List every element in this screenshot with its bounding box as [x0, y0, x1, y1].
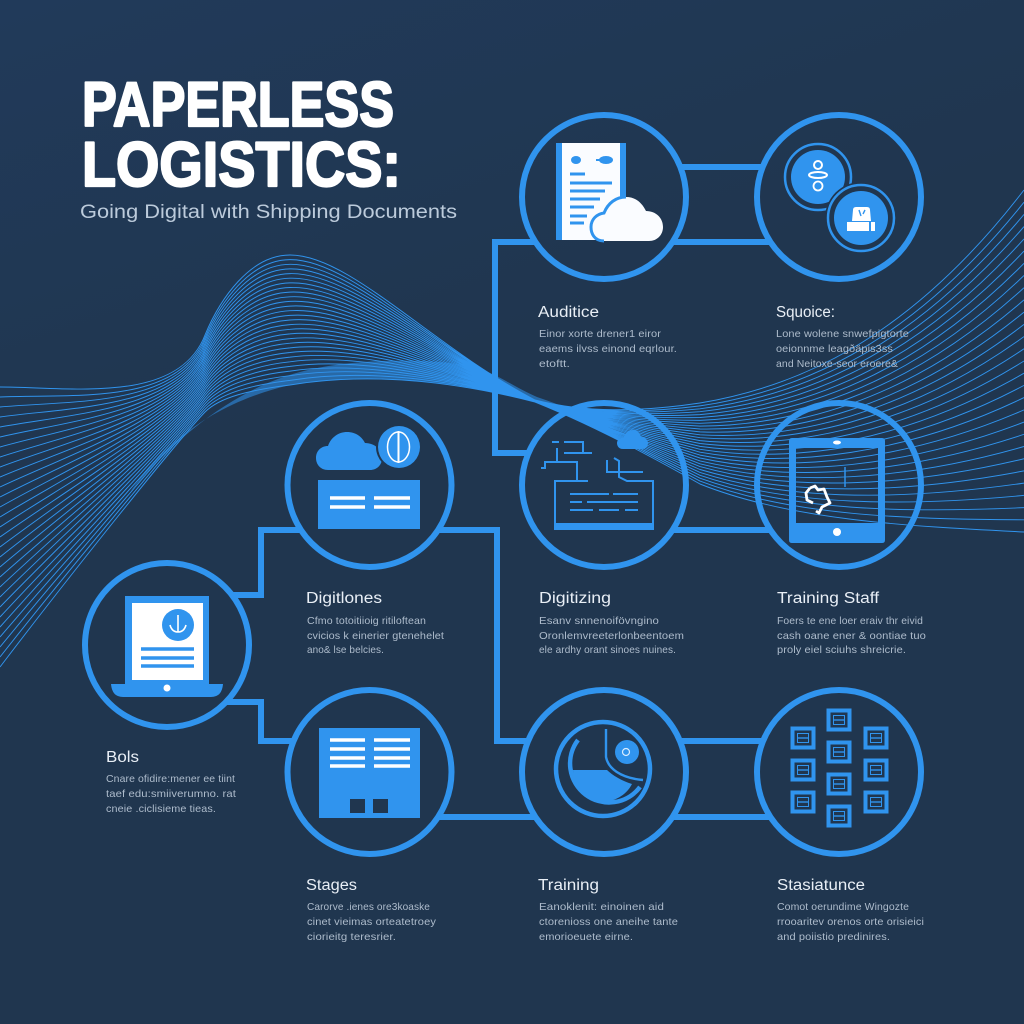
text: Digitlones: ano& lse belcies.	[307, 644, 384, 656]
icon: document with cloud	[556, 143, 663, 241]
text: Training Staff: Foers te ene loer eraiv thr eivid	[777, 615, 923, 627]
icon: laptop with document	[111, 596, 223, 697]
panel: Squoice	[757, 115, 921, 370]
text: Training: Training	[538, 877, 599, 894]
text: Bols: Bols	[106, 749, 139, 766]
icon: gauge dial	[556, 722, 650, 816]
title	[82, 70, 401, 200]
text: Stages	[306, 877, 437, 943]
text: Training Staff	[777, 590, 926, 656]
circle: Training Staff	[757, 403, 921, 567]
text: Bols	[106, 749, 236, 815]
text: Stages: Carorve .ienes ore3koaske	[307, 901, 430, 913]
text: Stasiatunce: and poiistio predinires.	[777, 931, 890, 943]
text: Bols: Cnare ofidire:mener ee tiint	[106, 773, 235, 785]
text: Training Staff: cash oane ener & oontiae tuo	[777, 630, 926, 642]
text: Stasiatunce: Comot oerundime Wingozte	[777, 901, 909, 913]
panel: Training	[522, 690, 686, 943]
text: Bols: cneie .ciclisieme tieas.	[106, 803, 216, 815]
panel: Bols	[85, 563, 249, 815]
circle: Stages	[288, 690, 452, 854]
circle: Training	[522, 690, 686, 854]
flowing wave line pattern	[0, 190, 1024, 667]
text: Squoice: oeionnme leagðäpis3ss	[776, 343, 893, 355]
text: Bols: taef edu:smiiverumno. rat	[106, 788, 236, 800]
text: Digitlones: Cfmo totoitiioig ritiloftean	[307, 615, 426, 627]
text: Digitizing: Esanv snnenoifövngino	[539, 615, 659, 627]
text: Digitizing: ele ardhy orant sinoes nuines.	[539, 644, 676, 656]
text: Squoice: and Neitoxe-seor eroere&	[776, 358, 898, 370]
text: Auditice	[538, 304, 677, 370]
text: Auditice: etoftt.	[539, 358, 570, 370]
text: Auditice: Einor xorte drener1 eiror	[539, 328, 661, 340]
text: Stages: ciorieitg teresrier.	[307, 931, 396, 943]
circle: Digitlones	[288, 403, 452, 567]
text: Digitizing: Digitizing	[539, 590, 611, 607]
text: Squoice: Squoice:	[776, 304, 835, 321]
panel: Stasiatunce	[757, 690, 924, 943]
text: Stasiatunce: Stasiatunce	[777, 877, 865, 894]
panel: Stages	[288, 690, 452, 943]
text: Training: Eanoklenit: einoinen aid	[539, 901, 664, 913]
connector lines	[226, 167, 770, 817]
text: Auditice: Auditice	[538, 304, 599, 321]
icon: document grid	[792, 710, 886, 826]
text: Training: emorioeuete eirne.	[539, 931, 633, 943]
icon: tablet	[789, 438, 885, 543]
title: LOGISTICS:	[82, 130, 401, 200]
circle: Bols	[85, 563, 249, 727]
circle: Stasiatunce	[757, 690, 921, 854]
text: Digitlones: cvicios k einerier gtenehelet	[307, 630, 444, 642]
text: Training	[538, 877, 678, 943]
title: PAPERLESS	[82, 70, 394, 140]
text: Digitizing: Oronlemvreeterlonbeentoem	[539, 630, 684, 642]
circle: Auditice	[522, 115, 686, 279]
circle: Digitizing	[522, 403, 686, 567]
panel: Digitizing	[522, 403, 686, 656]
text: Stasiatunce	[777, 877, 924, 943]
text: Training Staff: proly eiel sciuhs shreicrie.	[777, 644, 906, 656]
text: Auditice: eaems ilvss einond eqrlour.	[539, 343, 677, 355]
text: Stasiatunce: rrooaritev orenos orte orisieici	[777, 916, 924, 928]
text: Stages: Stages	[306, 877, 357, 894]
text: Squoice	[776, 304, 909, 370]
subtitle: Going Digital with Shipping Documents	[80, 202, 457, 223]
circle: Squoice	[757, 115, 921, 279]
text: Training Staff: Training Staff	[777, 590, 880, 607]
icon: document block	[319, 728, 420, 818]
icon: circuit and laptop	[541, 430, 653, 529]
panel: Auditice	[522, 115, 686, 370]
icon: two linked discs	[785, 144, 897, 254]
text: Stages: cinet vieimas orteatetroey	[307, 916, 437, 928]
text: Digitlones	[306, 590, 444, 656]
icon: cloud, disc and card	[316, 424, 422, 529]
text: Squoice: Lone wolene snwefpigtorte	[776, 328, 909, 340]
text: Training: ctorenioss one aneihe tante	[539, 916, 678, 928]
text: Digitlones: Digitlones	[306, 590, 382, 607]
panel: Training Staff	[757, 403, 926, 656]
panel: Digitlones	[288, 403, 452, 656]
text: Digitizing	[539, 590, 684, 656]
